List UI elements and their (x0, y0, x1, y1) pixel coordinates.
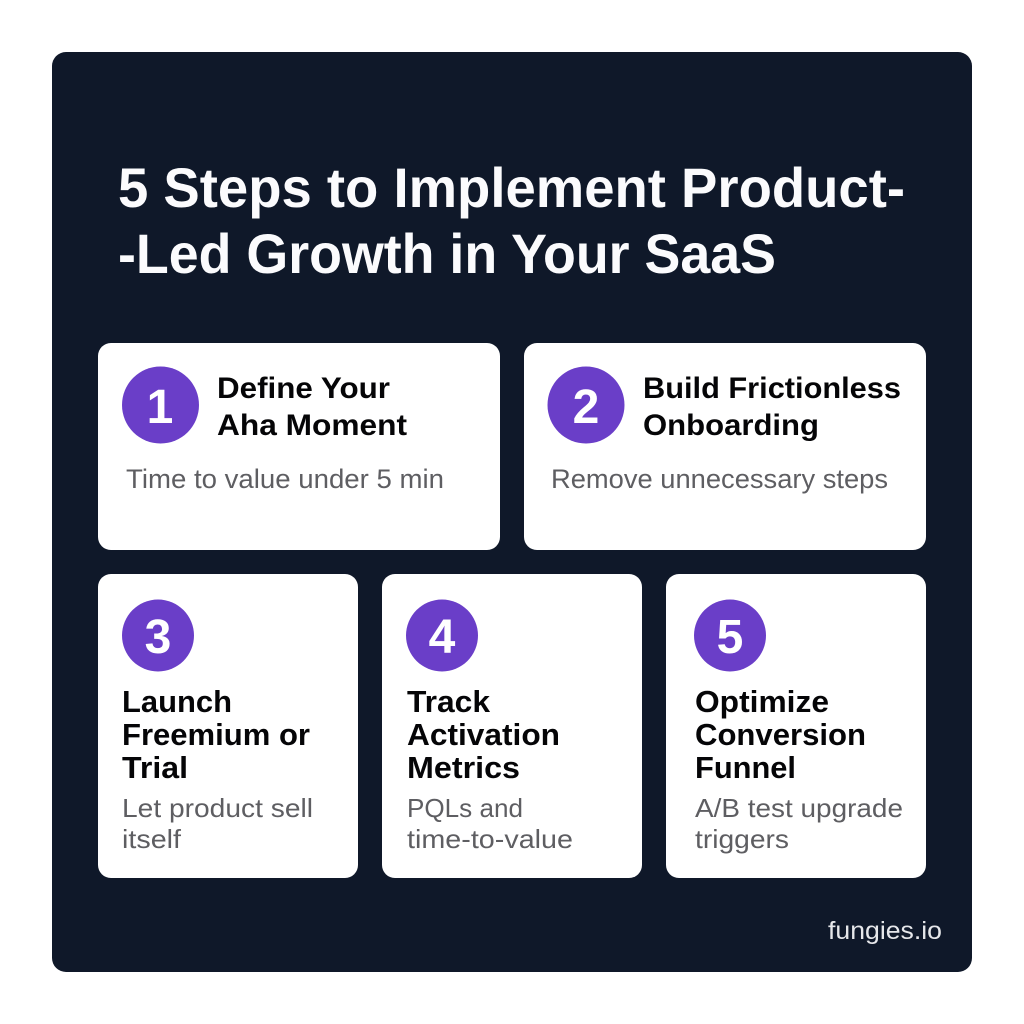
heading: step 5: Funnel (695, 750, 796, 785)
description: step 1: Time to value under 5 min (126, 464, 444, 494)
icon: number 2 badge: 2 (573, 381, 599, 434)
heading: step 1 (217, 372, 407, 442)
heading: step 3: Trial (122, 750, 188, 785)
heading: step 2 (643, 372, 901, 442)
heading: step 1: Define Your (217, 372, 390, 405)
description: step 2: Remove unnecessary steps (551, 464, 888, 494)
description: step 4 (407, 793, 573, 854)
icon: number 4 badge: 4 (429, 611, 456, 664)
description: step 4: PQLs and (407, 793, 523, 823)
heading: step 3 (122, 684, 310, 785)
heading: step 3: Freemium or (122, 717, 310, 752)
panel: step 3 (98, 574, 358, 878)
heading: step 4 (407, 684, 560, 785)
heading: step 5: Conversion (695, 717, 866, 752)
panel: step 2 (524, 343, 926, 550)
panel: step 1 (98, 343, 500, 550)
title: 5 Steps to Implement Product- (118, 156, 905, 219)
brand footer: fungies.io (828, 917, 942, 945)
panel: step 4 (382, 574, 642, 878)
heading: step 5: Optimize (695, 684, 829, 719)
heading: step 2: Onboarding (643, 409, 819, 442)
description: step 3: itself (122, 824, 182, 854)
panel: step 5 (666, 574, 926, 878)
heading: step 4: Track (407, 684, 491, 719)
icon: number 4 badge (406, 600, 478, 672)
heading: step 2: Build Frictionless (643, 372, 901, 405)
icon: number 3 badge: 3 (145, 611, 171, 664)
heading: step 4: Metrics (407, 750, 520, 785)
heading: step 4: Activation (407, 717, 560, 752)
title: -Led Growth in Your SaaS (118, 222, 776, 285)
icon: number 2 badge (548, 366, 624, 444)
description: step 4: time-to-value (407, 824, 573, 854)
icon: number 1 badge (122, 366, 199, 444)
title (118, 156, 905, 285)
description: step 5: triggers (695, 824, 789, 854)
description: step 5 (695, 793, 903, 854)
heading: step 3: Launch (122, 684, 232, 719)
heading: step 1: Aha Moment (217, 409, 407, 442)
description: step 3: Let product sell (122, 793, 313, 823)
icon: number 1 badge: 1 (147, 381, 173, 434)
icon: number 5 badge (694, 600, 766, 672)
description: step 3 (122, 793, 313, 854)
heading: step 5 (695, 684, 866, 785)
icon: number 3 badge (122, 600, 194, 672)
icon: number 5 badge: 5 (717, 611, 743, 664)
description: step 5: A/B test upgrade (695, 793, 903, 823)
